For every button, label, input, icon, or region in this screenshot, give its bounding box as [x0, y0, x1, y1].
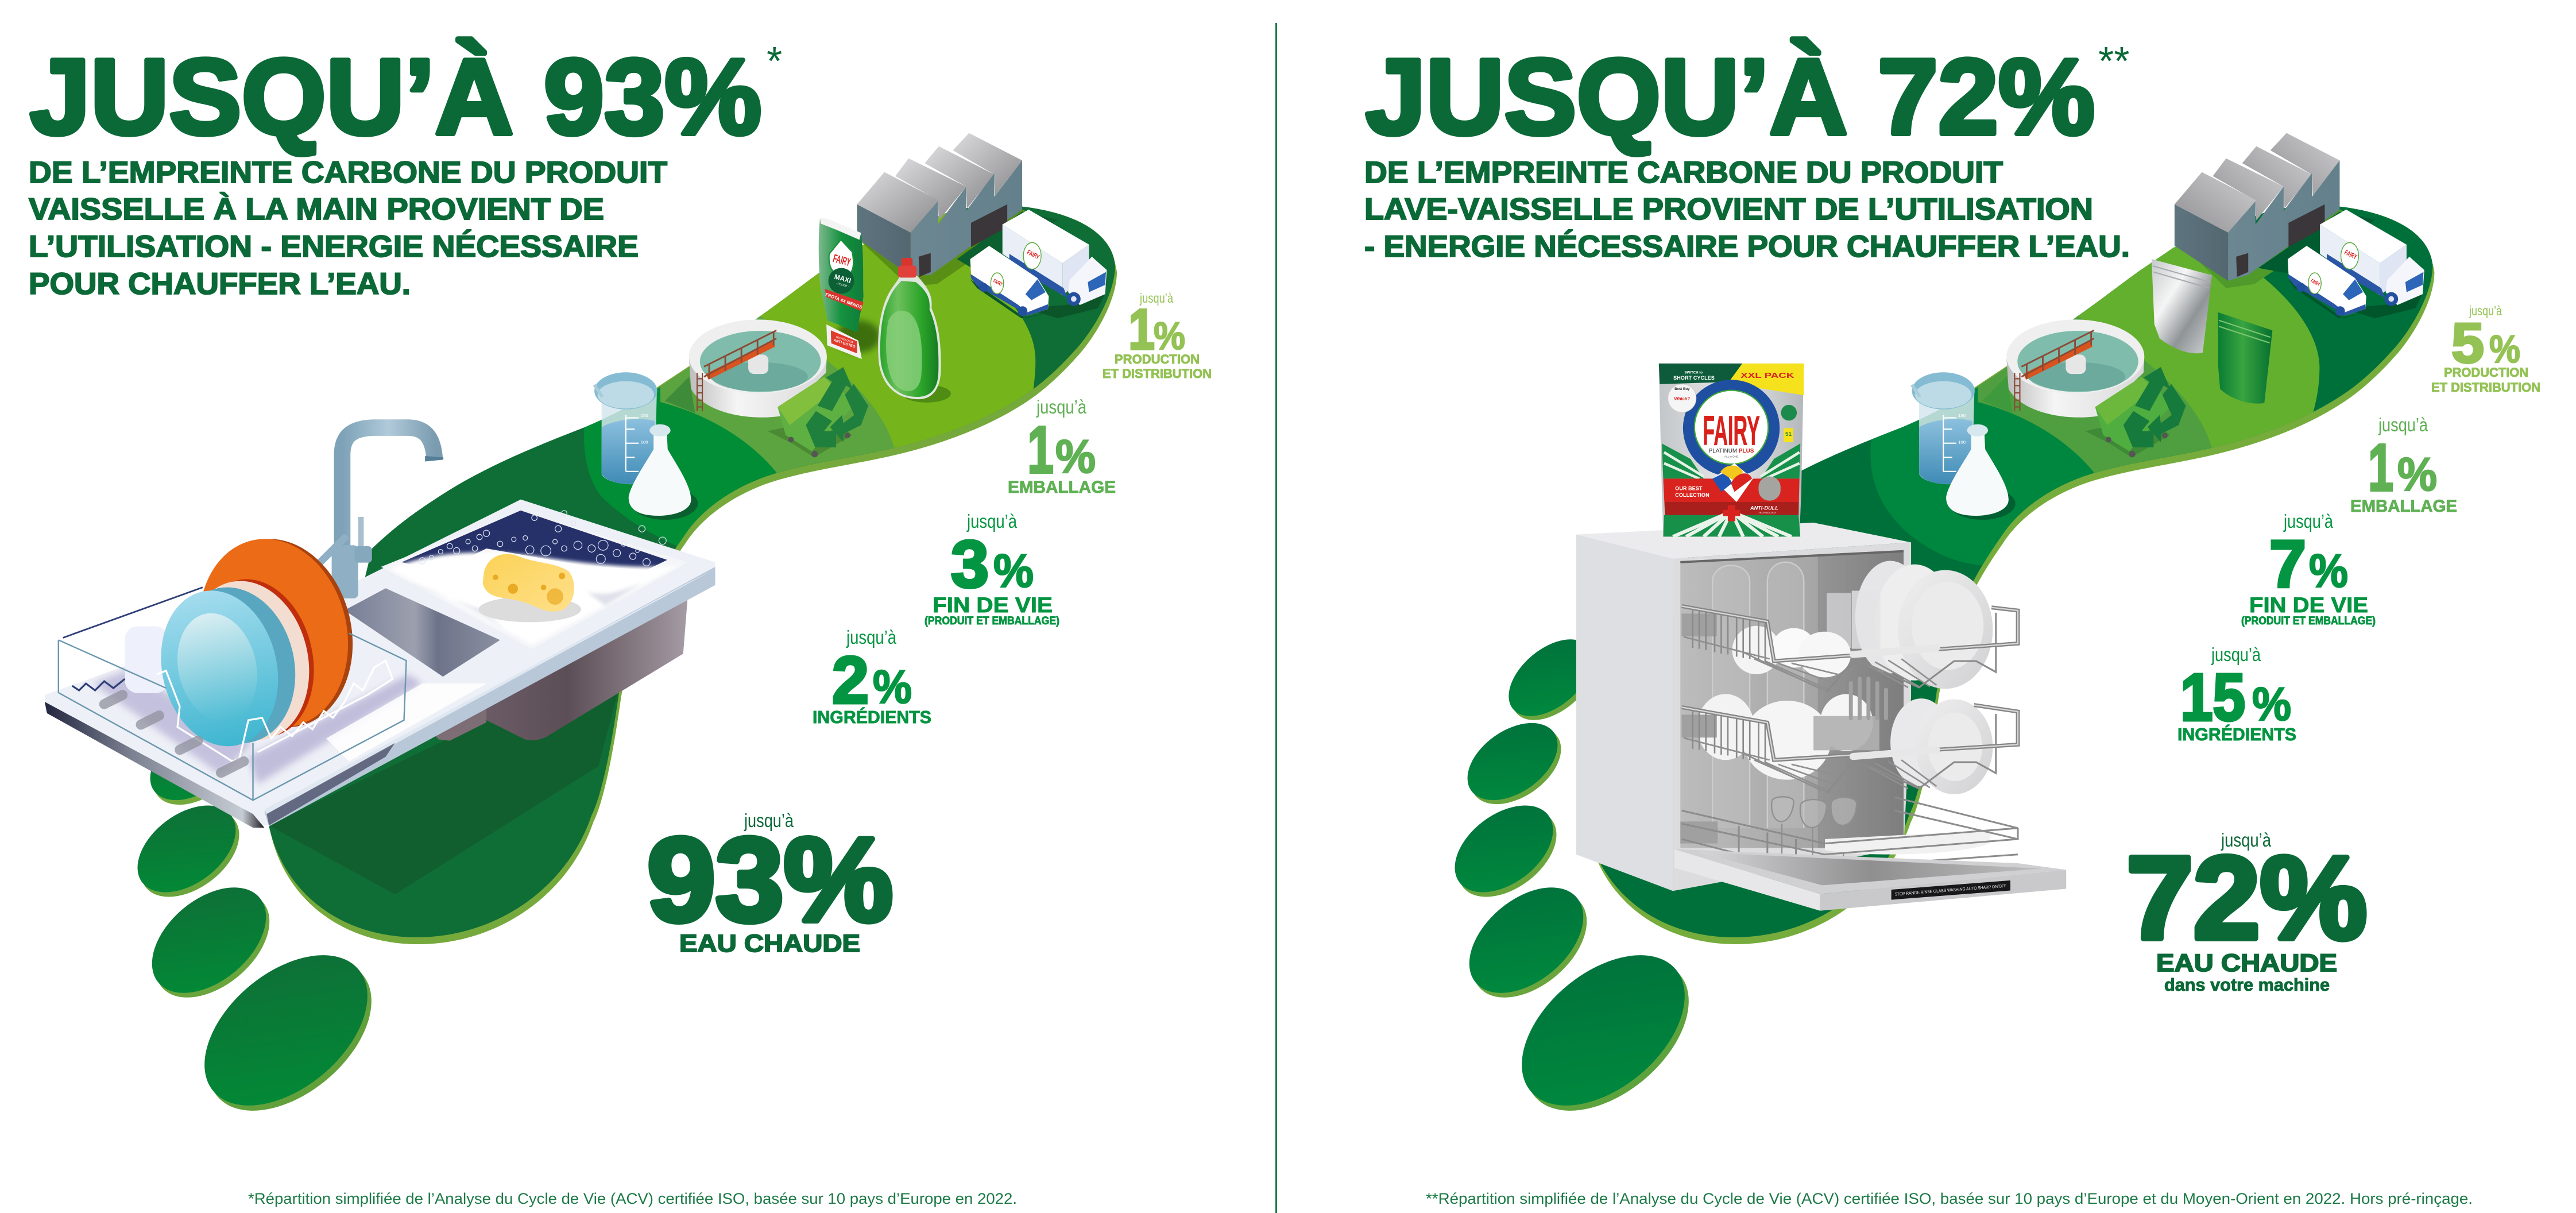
- icon: Fairy Platinum Plus pack: SWITCH to: [1684, 371, 1703, 375]
- subheading: POUR CHAUFFER L’EAU.: [29, 267, 411, 301]
- stat: eau chaude 93%: EAU CHAUDE: [679, 930, 860, 957]
- icon: faucet: [317, 428, 443, 598]
- icon: measuring beaker: 150: [641, 413, 648, 418]
- stat: eau chaude 93%: 93%: [647, 813, 893, 946]
- stat: ingrédients 15%: 15: [2180, 660, 2245, 735]
- icon: Fairy Maxi bottle: MAXI: [833, 273, 852, 285]
- icon: washing-up liquid bottle: [878, 258, 951, 403]
- stat: production et distribution 5%: PRODUCTION: [2444, 365, 2528, 380]
- dishwasher illustration: [1576, 364, 2066, 911]
- stat: production et distribution 1%: 1: [1128, 298, 1155, 362]
- subheading: DE L’EMPREINTE CARBONE DU PRODUIT: [29, 156, 667, 190]
- footnote right: **Répartition simplifiée de l’Analyse du Cycle de Vie (ACV) certifiée ISO, basée sur 10 pays d’Europe et du Moyen-Orient en 2022. Hors pré-rinçage.: [1426, 1190, 2473, 1207]
- stat: fin de vie 7%: %: [2309, 545, 2348, 597]
- icon: Fairy Platinum Plus pack: FAIRY: [1703, 408, 1760, 454]
- icon: measuring beaker: 100: [641, 439, 648, 445]
- stat: production et distribution 5%: ET DISTRIBUTION: [2431, 380, 2540, 395]
- stat: fin de vie 3%: [925, 511, 1059, 627]
- icon: water treatment basin: [1982, 319, 2144, 418]
- stat: fin de vie 7%: 7: [2269, 527, 2306, 601]
- icon: silver refill pouch: [2152, 259, 2212, 353]
- stat: emballage 1%: jusqu’à: [1036, 396, 1087, 418]
- icon: factory: [2175, 133, 2375, 288]
- icon: second sink basin: [345, 588, 500, 677]
- subheading: [1364, 156, 2130, 264]
- icon: open door with control panel: STOP RANGE RINSE GLASS WASHING AUTO SHARP ON/OFF: [1894, 883, 2007, 897]
- icon: lower rack with plates: [1682, 679, 2018, 794]
- toes of right footprint: [1438, 624, 1717, 1141]
- stat: emballage 1%: %: [2397, 449, 2437, 501]
- stat: emballage 1%: 1: [2368, 430, 2393, 505]
- icon: sponge: [483, 554, 574, 612]
- icon: Fairy Maxi bottle: FAIRY: [831, 252, 852, 269]
- icon: Fairy Platinum Plus pack: COLLECTION: [1675, 492, 1709, 498]
- footnote marker: **: [2098, 38, 2129, 83]
- stat: ingrédients 2%: 2: [832, 643, 869, 717]
- icon: dishes in rack: [125, 524, 371, 758]
- stat: production et distribution 5%: 5: [2451, 311, 2484, 374]
- icon: lorry: [1003, 210, 1107, 318]
- icon: Fairy Platinum Plus pack: OUR BEST: [1675, 485, 1703, 491]
- stat: eau chaude 72%: jusqu’à: [2221, 829, 2272, 851]
- life-cycle illustrations: [1912, 133, 2424, 520]
- icon: van: [2288, 246, 2367, 318]
- stat: emballage 1%: EMBALLAGE: [2350, 497, 2457, 516]
- icon: foam basin: [381, 511, 688, 649]
- icon: van: FAIRY: [2310, 278, 2321, 287]
- icon: measuring beaker: [594, 372, 657, 484]
- panel: hand dishwashing: [29, 37, 1212, 1207]
- icon: Fairy Maxi bottle: TECNOLOGIA: [835, 335, 854, 345]
- footnote left: *Répartition simplifiée de l’Analyse du Cycle de Vie (ACV) certifiée ISO, basée sur 10 pays d’Europe en 2022.: [248, 1190, 1017, 1207]
- stat: emballage 1%: EMBALLAGE: [1008, 478, 1116, 497]
- stat: fin de vie 7%: (PRODUIT ET EMBALLAGE): [2241, 615, 2376, 627]
- icon: Fairy Maxi bottle: FROTA 4X MENOS: [825, 292, 863, 310]
- heading: jusqu'à 72%: JUSQU’À 72%: [1366, 37, 2095, 157]
- stat: ingrédients 15%: INGRÉDIENTS: [2177, 724, 2296, 744]
- stat: production et distribution 5%: jusqu’à: [2469, 303, 2502, 318]
- icon: open door with control panel: [1674, 849, 2066, 911]
- stat: production et distribution 1%: PRODUCTION: [1115, 352, 1200, 366]
- icon: top rack with plates: [1682, 561, 2018, 692]
- icon: Fairy Platinum Plus pack: ALL in ONE: [1724, 455, 1738, 458]
- icon: water treatment basin: [665, 319, 827, 418]
- icon: countertop: [45, 500, 715, 828]
- stat: emballage 1%: [2350, 414, 2457, 516]
- icon: dish rack: [59, 588, 407, 800]
- stat: fin de vie 7%: [2241, 511, 2376, 627]
- stat: ingrédients 2%: %: [873, 661, 912, 713]
- subheading: L’UTILISATION - ENERGIE NÉCESSAIRE: [29, 229, 639, 264]
- stat: fin de vie 3%: 3: [951, 527, 989, 601]
- stat: production et distribution 1%: jusqu’à: [1139, 291, 1173, 306]
- stat: fin de vie 3%: FIN DE VIE: [933, 593, 1053, 617]
- stat: fin de vie 3%: (PRODUIT ET EMBALLAGE): [925, 615, 1059, 627]
- stat: ingrédients 15%: %: [2252, 678, 2291, 731]
- icon: Fairy Platinum Plus pack: [1659, 364, 1804, 536]
- right footprint sole with life-cycle bands: [1598, 207, 2435, 944]
- stat: fin de vie 3%: %: [993, 545, 1034, 597]
- heading: jusqu'à 93%: JUSQU’À 93%: [30, 37, 761, 157]
- subheading: LAVE-VAISSELLE PROVIENT DE L’UTILISATION: [1364, 192, 2093, 226]
- stat: eau chaude 93%: jusqu’à: [744, 810, 794, 831]
- stat: production et distribution 5%: %: [2489, 327, 2520, 371]
- stat: fin de vie 7%: FIN DE VIE: [2249, 593, 2368, 617]
- stat: eau chaude 72%: dans votre machine: [2164, 975, 2330, 995]
- stat: emballage 1%: jusqu’à: [2378, 414, 2428, 435]
- stat: fin de vie 7%: jusqu’à: [2283, 511, 2334, 532]
- icon: sink underside: [434, 597, 688, 741]
- icon: Fairy Platinum Plus pack: Best Buy: [1674, 387, 1690, 391]
- icon: flask of powder: [1946, 424, 2016, 520]
- stat: eau chaude 72%: 72%: [2126, 832, 2367, 964]
- stat: ingrédients 2%: INGRÉDIENTS: [813, 707, 931, 727]
- left footprint sole with life-cycle bands: [269, 207, 1117, 944]
- icon: Fairy Maxi bottle: [819, 218, 880, 359]
- icon: Fairy Maxi bottle: · PODER ·: [836, 282, 849, 288]
- icon: van: [970, 246, 1050, 318]
- icon: measuring beaker: 150: [1958, 413, 1966, 418]
- icon: Fairy Platinum Plus pack: TECHNOLOGY: [1758, 511, 1777, 514]
- icon: green refill pouch: [2218, 312, 2272, 404]
- stat: production et distribution 5%: [2431, 303, 2540, 395]
- icon: recycling bin: [768, 367, 868, 457]
- icon: Fairy Platinum Plus pack: 51: [1785, 431, 1792, 438]
- icon: Fairy Platinum Plus pack: XXL PACK: [1740, 371, 1794, 380]
- icon: van: FAIRY: [992, 278, 1004, 287]
- toes of left footprint: [121, 707, 400, 1141]
- icon: Fairy Maxi bottle: ANTI-GOTEO: [833, 338, 856, 349]
- subheading: [29, 156, 667, 301]
- stat: ingrédients 15%: jusqu’à: [2211, 644, 2261, 665]
- icon: factory: [857, 133, 1058, 286]
- footnote marker: *: [767, 38, 782, 83]
- stat: ingrédients 15%: [2177, 644, 2296, 744]
- stat: emballage 1%: [1008, 396, 1116, 497]
- icon: dishwasher cabinet: [1576, 523, 1911, 891]
- subheading: - ENERGIE NÉCESSAIRE POUR CHAUFFER L’EAU.: [1364, 229, 2130, 264]
- icon: lorry: [2320, 210, 2424, 318]
- stat: fin de vie 3%: jusqu’à: [966, 511, 1018, 532]
- stat: ingrédients 2%: jusqu’à: [846, 627, 897, 648]
- icon: Fairy Platinum Plus pack: SHORT CYCLES: [1673, 375, 1715, 381]
- sink illustration: [45, 428, 715, 828]
- icon: Fairy Platinum Plus pack: PLATINUM PLUS: [1709, 448, 1754, 454]
- stat: emballage 1%: %: [1055, 431, 1096, 483]
- stat: production et distribution 1%: ET DISTRIBUTION: [1103, 366, 1212, 381]
- stat: production et distribution 1%: [1103, 291, 1212, 381]
- icon: lorry: FAIRY: [2343, 248, 2358, 261]
- stat: emballage 1%: 1: [1027, 412, 1054, 487]
- stat: production et distribution 1%: %: [1154, 314, 1185, 358]
- panel: dishwasher: [1364, 37, 2540, 1207]
- subheading: VAISSELLE À LA MAIN PROVIENT DE: [29, 192, 604, 226]
- icon: flask of powder: [629, 424, 698, 520]
- icon: Fairy Platinum Plus pack: ANTI-DULL: [1750, 505, 1778, 511]
- icon: recycling bin: [2085, 367, 2186, 457]
- life-cycle illustrations: [594, 133, 1107, 520]
- icon: lorry: FAIRY: [1026, 248, 1041, 261]
- icon: measuring beaker: 100: [1958, 439, 1966, 445]
- icon: measuring beaker: [1912, 372, 1975, 484]
- icon: bottom basket with glasses: [1680, 797, 2018, 870]
- stat: eau chaude 72%: EAU CHAUDE: [2156, 949, 2337, 977]
- icon: Fairy Platinum Plus pack: Which?: [1674, 396, 1690, 401]
- stat: ingrédients 2%: [813, 627, 931, 727]
- subheading: DE L’EMPREINTE CARBONE DU PRODUIT: [1364, 156, 2003, 190]
